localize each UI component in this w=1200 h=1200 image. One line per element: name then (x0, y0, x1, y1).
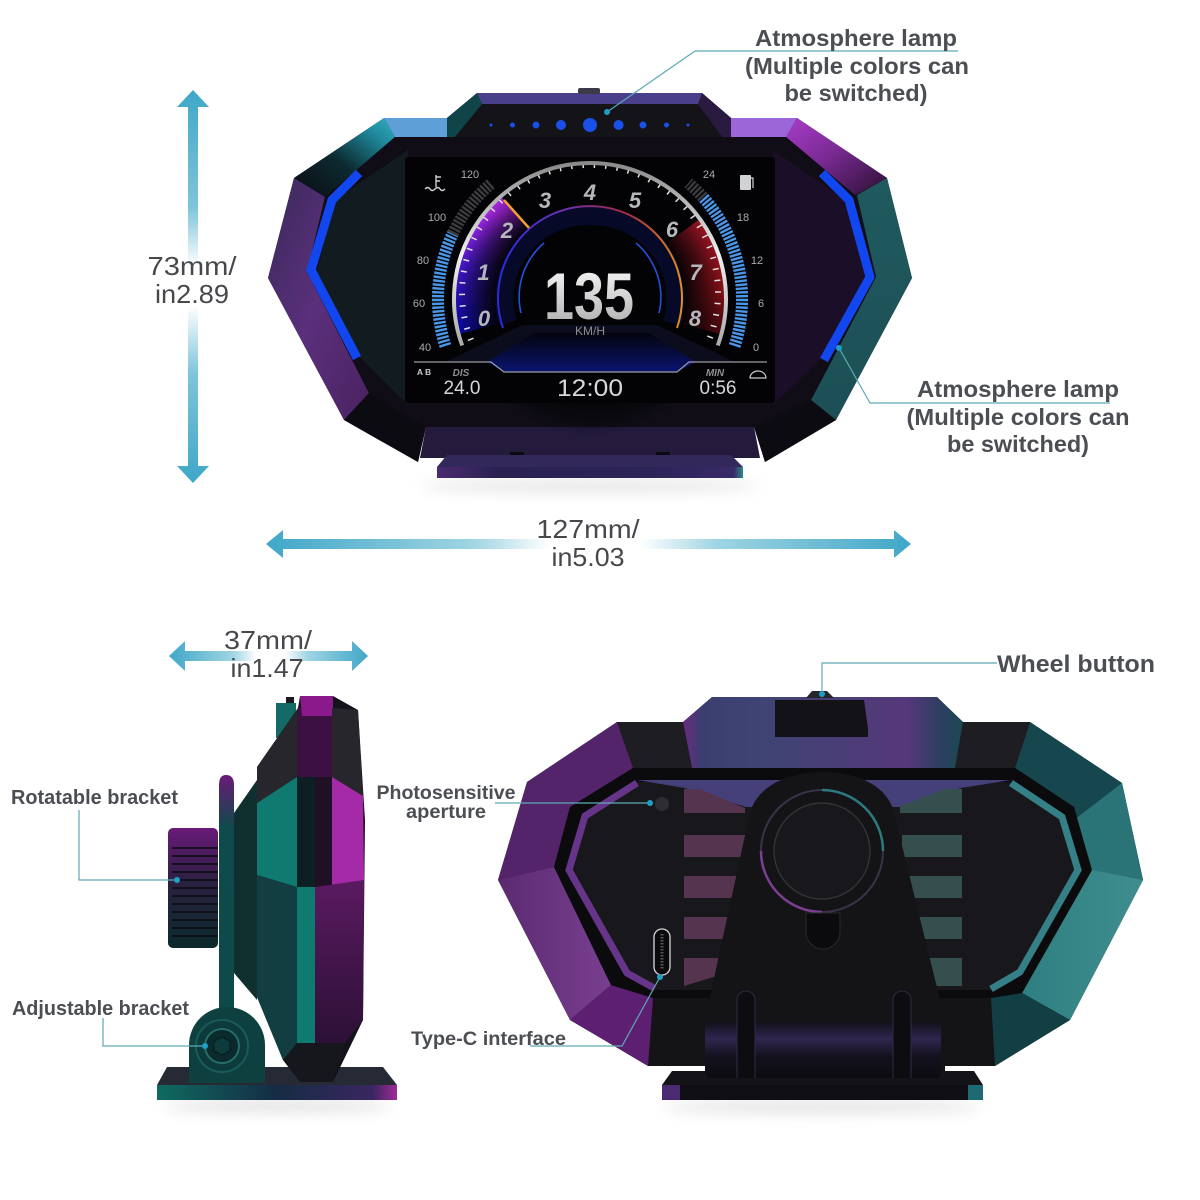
tachometer digits: 2 (500, 218, 514, 243)
callout: wheel button: Wheel button (997, 651, 1155, 678)
temperature bar (438, 234, 453, 346)
tachometer digits: 0 (478, 306, 491, 331)
atmosphere LED row (490, 118, 690, 132)
callout: side atmosphere lamp: be switched) (947, 431, 1089, 457)
time info: 0:56 (700, 378, 736, 399)
left coloured sector (478, 214, 516, 328)
back left facets (498, 722, 633, 880)
time info (700, 368, 766, 399)
front view device (268, 88, 912, 478)
screen (405, 157, 775, 435)
speed value: 135 (544, 259, 634, 333)
scale numbers: 18 (737, 212, 749, 224)
black recessed bezel (554, 768, 1092, 998)
callout: rotatable bracket: Rotatable bracket (11, 787, 178, 809)
back top cap (683, 697, 963, 768)
tachometer digits: 8 (689, 306, 702, 331)
side base plate (157, 1067, 397, 1100)
cone behind body (234, 780, 257, 1000)
wheel nub (578, 88, 600, 94)
callout: wheel button (819, 651, 1155, 697)
back outer body (498, 697, 1143, 1066)
scale numbers (413, 169, 764, 354)
right blue light strip (822, 173, 870, 360)
depth label: 37mm/ (224, 625, 313, 655)
callout: adjustable bracket: Adjustable bracket (12, 998, 189, 1020)
width label: 127mm/ (536, 514, 640, 544)
height label (148, 251, 237, 309)
top cap (447, 93, 731, 137)
scale numbers: 100 (428, 212, 446, 224)
left purple facet (268, 178, 369, 420)
inner ring (498, 206, 682, 328)
scale numbers: 120 (461, 169, 479, 181)
bracket arm (219, 775, 234, 1035)
upper left facet (294, 118, 395, 197)
callout: photosensitive aperture: aperture (406, 802, 486, 823)
scale numbers: 40 (419, 342, 431, 354)
callout: type-c interface (411, 974, 663, 1050)
tachometer digits: 6 (666, 217, 679, 242)
side view device (157, 696, 397, 1100)
rear shoulders (617, 722, 692, 768)
hinge (705, 991, 941, 1085)
temperature icon (425, 175, 445, 190)
inner panel (567, 782, 1079, 990)
back base plate (662, 1071, 983, 1100)
tachometer digits: 3 (539, 188, 551, 213)
back view device (498, 691, 1143, 1100)
callout: photosensitive aperture: Photosensitive (376, 783, 516, 804)
inner blue arcs (519, 243, 544, 313)
lower dark facets (344, 393, 426, 462)
sector fade (454, 163, 726, 435)
right teal facet (811, 178, 912, 420)
depth label: in1.47 (230, 653, 304, 683)
trip info: DIS (453, 368, 470, 379)
scale numbers: 6 (758, 298, 764, 310)
clock: 12:00 (557, 375, 623, 402)
orange needle (504, 200, 529, 228)
callout: photosensitive aperture (376, 783, 653, 823)
scale numbers: 12 (751, 255, 763, 267)
road graphic (445, 325, 735, 362)
callout: top atmosphere lamp: Atmosphere lamp (755, 25, 957, 51)
top band (637, 780, 1011, 807)
left blue light strip (311, 173, 359, 358)
right coloured sector (681, 233, 702, 328)
slot (806, 913, 840, 949)
width label: in5.03 (552, 542, 624, 572)
speed unit: KM/H (575, 324, 605, 338)
callout: type-c interface: Type-C interface (411, 1029, 566, 1050)
callout: top atmosphere lamp: be switched) (784, 80, 928, 106)
tachometer digits: 5 (629, 188, 642, 213)
callout: side atmosphere lamp: Atmosphere lamp (917, 376, 1119, 402)
callout: side atmosphere lamp (836, 345, 1130, 457)
mount bracket (705, 772, 945, 1078)
trip info (417, 367, 480, 399)
inner bezel (307, 137, 876, 427)
callout: top atmosphere lamp (604, 25, 969, 115)
height label: 73mm/ (148, 251, 237, 281)
callout: adjustable bracket (12, 998, 208, 1049)
shadow under back device (662, 1101, 982, 1113)
device outer body (268, 93, 912, 462)
right coloured rim (991, 783, 1078, 989)
photosensitive aperture (655, 797, 669, 811)
scale numbers: 80 (417, 255, 429, 267)
fuel bar (703, 197, 742, 346)
tachometer digits: 7 (689, 260, 703, 285)
stand plate (437, 452, 743, 478)
height label: in2.89 (155, 279, 229, 309)
chin (420, 427, 760, 458)
knob (168, 828, 218, 948)
type-c port (654, 929, 670, 975)
callout: side atmosphere lamp: (Multiple colors can (906, 404, 1130, 430)
tachometer digits: 1 (477, 260, 490, 285)
tachometer digits: 4 (583, 180, 596, 205)
shadow under side device (162, 1100, 392, 1112)
width label (536, 514, 640, 572)
top nub (276, 703, 296, 738)
upper right facet (786, 118, 887, 195)
trip info: 24.0 (444, 378, 480, 399)
silver arc (454, 163, 726, 346)
divider line (414, 362, 767, 372)
back right facets (1015, 722, 1143, 880)
callout: top atmosphere lamp: (Multiple colors can (745, 53, 969, 79)
gauge ticks (462, 165, 718, 340)
width dimension arrow (266, 514, 911, 572)
trip info: A B (417, 367, 431, 377)
scale numbers: 0 (753, 342, 759, 354)
shadow under front device (420, 480, 760, 492)
time info: MIN (706, 368, 725, 379)
depth dimension arrow (169, 625, 368, 683)
pivot foot (189, 1007, 265, 1083)
right cooling ribs (900, 789, 962, 986)
scale numbers: 60 (413, 298, 425, 310)
height dimension arrow (148, 90, 237, 483)
wheel button block (775, 691, 868, 737)
fuel icon (740, 175, 753, 190)
left cooling ribs (684, 789, 746, 986)
scale numbers: 24 (703, 169, 715, 181)
tachometer digits (477, 180, 703, 331)
depth label (224, 625, 313, 683)
left coloured rim (569, 783, 654, 988)
side body (257, 696, 365, 1082)
callout: rotatable bracket (11, 787, 180, 883)
